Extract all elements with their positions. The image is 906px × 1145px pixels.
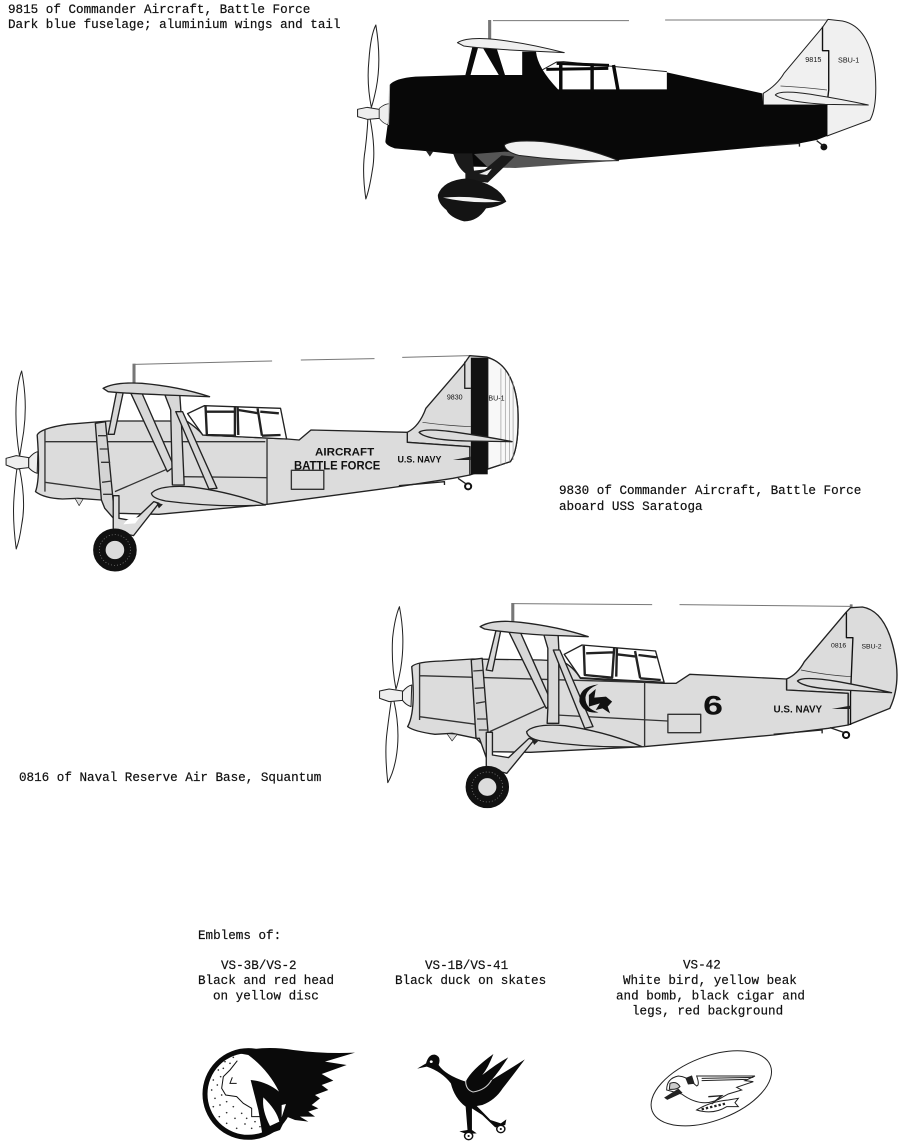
caption: aircraft 9815: Dark blue fuselage; aluminium wings and tail	[8, 18, 341, 32]
caption: VS-42 emblem: and bomb, black cigar and	[616, 990, 805, 1004]
caption: aircraft 9830	[559, 484, 861, 514]
caption: aircraft 9830: aboard USS Saratoga	[559, 500, 703, 514]
emblem: head on disc	[205, 1048, 355, 1137]
aircraft profile: 0816 Naval Reserve SBU-2: 6	[703, 691, 723, 720]
aircraft profile: 9830 Aircraft Battle Force: AIRCRAFT	[315, 446, 374, 458]
heading: emblems: Emblems of:	[198, 929, 281, 943]
aircraft profile: 0816 Naval Reserve SBU-2: 0816	[831, 643, 846, 650]
emblem on fuselage	[579, 684, 612, 713]
emblem: white bird with bomb and cigar	[641, 1036, 782, 1141]
caption: VS-1B/VS-41 emblem	[395, 959, 546, 988]
caption: VS-42 emblem: legs, red background	[632, 1004, 783, 1018]
aircraft profile: 0816 Naval Reserve SBU-2: U.S. NAVY	[774, 704, 822, 715]
caption: VS-42 emblem	[616, 958, 805, 1018]
caption: VS-3B/VS-2 emblem: VS-3B/VS-2	[221, 959, 297, 973]
aircraft profile: 0816 Naval Reserve SBU-2	[380, 603, 897, 802]
caption: aircraft 0816: 0816 of Naval Reserve Air Base, Squantum	[19, 771, 321, 785]
caption: aircraft 9830: 9830 of Commander Aircraft, Battle Force	[559, 484, 861, 498]
aircraft profile: 9815 dark blue SBU-1: 9815	[805, 56, 821, 64]
caption: VS-42 emblem: VS-42	[683, 958, 721, 972]
caption: aircraft 9815: 9815 of Commander Aircraft, Battle Force	[8, 3, 310, 17]
caption: VS-42 emblem: White bird, yellow beak	[623, 974, 797, 988]
caption: VS-1B/VS-41 emblem: Black duck on skates	[395, 974, 546, 988]
emblem: duck on skates	[417, 1054, 525, 1140]
aircraft profile: 0816 Naval Reserve SBU-2: SBU-2	[861, 643, 882, 650]
aircraft profile: 9830 Aircraft Battle Force: U.S. NAVY	[397, 454, 441, 464]
aircraft profile: 9815 dark blue SBU-1	[358, 19, 876, 221]
caption: aircraft 9815	[8, 3, 341, 32]
aircraft profile: 9815 dark blue SBU-1: SBU-1	[838, 57, 859, 65]
aircraft profile: 9830 Aircraft Battle Force: BATTLE FORCE	[294, 459, 380, 473]
aircraft profile: 9830 Aircraft Battle Force	[6, 356, 518, 565]
aircraft profile: 9830 Aircraft Battle Force: 9830	[447, 395, 463, 402]
aircraft profile: 9830 Aircraft Battle Force: BU-1	[488, 395, 505, 402]
caption: VS-3B/VS-2 emblem: Black and red head	[198, 974, 334, 988]
caption: VS-3B/VS-2 emblem	[198, 959, 334, 1004]
caption: VS-1B/VS-41 emblem: VS-1B/VS-41	[425, 959, 508, 973]
caption: VS-3B/VS-2 emblem: on yellow disc	[213, 990, 319, 1004]
